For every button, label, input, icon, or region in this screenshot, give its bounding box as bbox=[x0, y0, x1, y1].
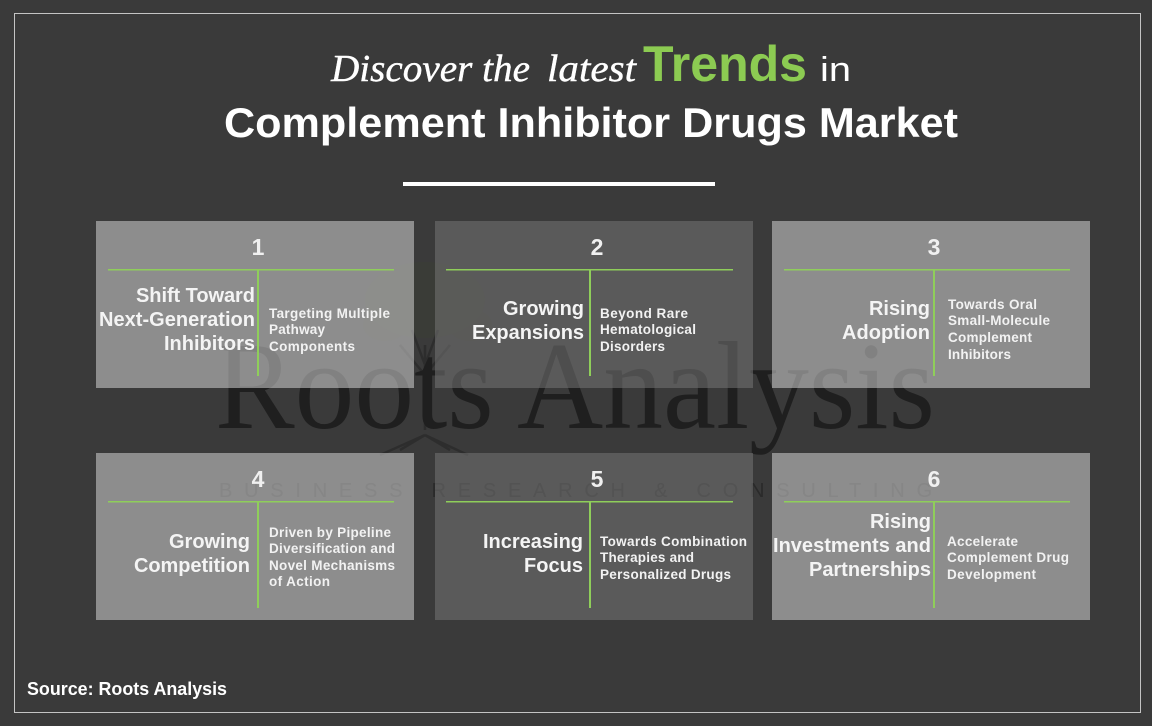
card 2 description bbox=[600, 306, 696, 354]
card 4 description bbox=[269, 525, 395, 589]
card 2 bbox=[435, 221, 753, 388]
card 2 description: Disorders bbox=[600, 339, 665, 354]
card 4 heading: Competition bbox=[134, 555, 250, 577]
card 4 heading: Growing bbox=[169, 531, 250, 553]
watermark: Roots Analysis logo: Roots Analysis bbox=[215, 318, 935, 456]
card 2 description: Beyond Rare bbox=[600, 306, 688, 321]
card 2 heading bbox=[472, 298, 584, 344]
card 5 heading: Increasing bbox=[483, 531, 583, 553]
card 1 description: Components bbox=[269, 339, 355, 354]
card 5 heading: Focus bbox=[524, 555, 583, 577]
card 3 heading: Rising bbox=[869, 298, 930, 320]
card 1 heading: Inhibitors bbox=[164, 333, 255, 355]
card 1 description bbox=[269, 306, 390, 354]
card 3 number: 3 bbox=[928, 234, 940, 260]
card 6 heading: Rising bbox=[870, 511, 931, 533]
watermark: Roots Analysis logo: BUSINESS RESEARCH & CONSULTING bbox=[219, 480, 932, 502]
card 4 bbox=[96, 453, 414, 620]
card 4 description: of Action bbox=[269, 574, 330, 589]
card 5 number: 5 bbox=[591, 466, 604, 492]
card 5 description: Personalized Drugs bbox=[600, 567, 731, 582]
card 6 description: Complement Drug bbox=[947, 550, 1069, 565]
card 1 heading: Shift Toward bbox=[136, 285, 255, 307]
card 3 heading: Adoption bbox=[842, 322, 930, 344]
card 4 description: Novel Mechanisms bbox=[269, 558, 395, 573]
card 4 description: Diversification and bbox=[269, 541, 395, 556]
card 1 description: Targeting Multiple bbox=[269, 306, 390, 321]
card 5 description bbox=[600, 534, 747, 582]
card 2 heading: Growing bbox=[503, 298, 584, 320]
title bbox=[224, 36, 958, 146]
card 5 heading bbox=[483, 531, 583, 577]
title: in bbox=[820, 51, 851, 89]
card 3 description: Towards Oral bbox=[948, 297, 1037, 312]
card 1 heading: Next-Generation bbox=[99, 309, 255, 331]
card 6 description: Accelerate bbox=[947, 534, 1018, 549]
title: Complement Inhibitor Drugs Market bbox=[224, 99, 958, 146]
card 6 number: 6 bbox=[928, 466, 940, 492]
card 2 heading: Expansions bbox=[472, 322, 584, 344]
card 3 description: Small-Molecule bbox=[948, 313, 1050, 328]
card 6 heading: Investments and bbox=[773, 535, 931, 557]
title: Trends bbox=[643, 36, 807, 92]
card 3 description: Complement bbox=[948, 330, 1032, 345]
source note: Source: Roots Analysis bbox=[27, 679, 227, 699]
card 4 number: 4 bbox=[252, 466, 265, 492]
card 6 bbox=[772, 453, 1090, 620]
card 4 description: Driven by Pipeline bbox=[269, 525, 391, 540]
card 3 description bbox=[948, 297, 1050, 362]
card 3 heading bbox=[842, 298, 930, 344]
card 1 bbox=[96, 221, 414, 388]
watermark: Roots Analysis logo bbox=[215, 262, 935, 502]
card 5 description: Towards Combination bbox=[600, 534, 747, 549]
card 3 bbox=[772, 221, 1090, 388]
card 2 description: Hematological bbox=[600, 322, 696, 337]
title underline bbox=[403, 182, 715, 186]
card 1 heading bbox=[99, 285, 255, 355]
title: latest bbox=[547, 48, 638, 90]
card 5 bbox=[435, 453, 753, 620]
card 5 description: Therapies and bbox=[600, 550, 694, 565]
card 6 heading bbox=[773, 511, 931, 581]
card 3 description: Inhibitors bbox=[948, 347, 1011, 362]
card 6 description: Development bbox=[947, 567, 1036, 582]
card 6 description bbox=[947, 534, 1069, 582]
card 6 heading: Partnerships bbox=[809, 559, 931, 581]
card 1 description: Pathway bbox=[269, 322, 325, 337]
card 1 number: 1 bbox=[252, 234, 265, 260]
card 4 heading bbox=[134, 531, 250, 577]
title: Discover the bbox=[330, 48, 530, 90]
card 2 number: 2 bbox=[591, 234, 603, 260]
